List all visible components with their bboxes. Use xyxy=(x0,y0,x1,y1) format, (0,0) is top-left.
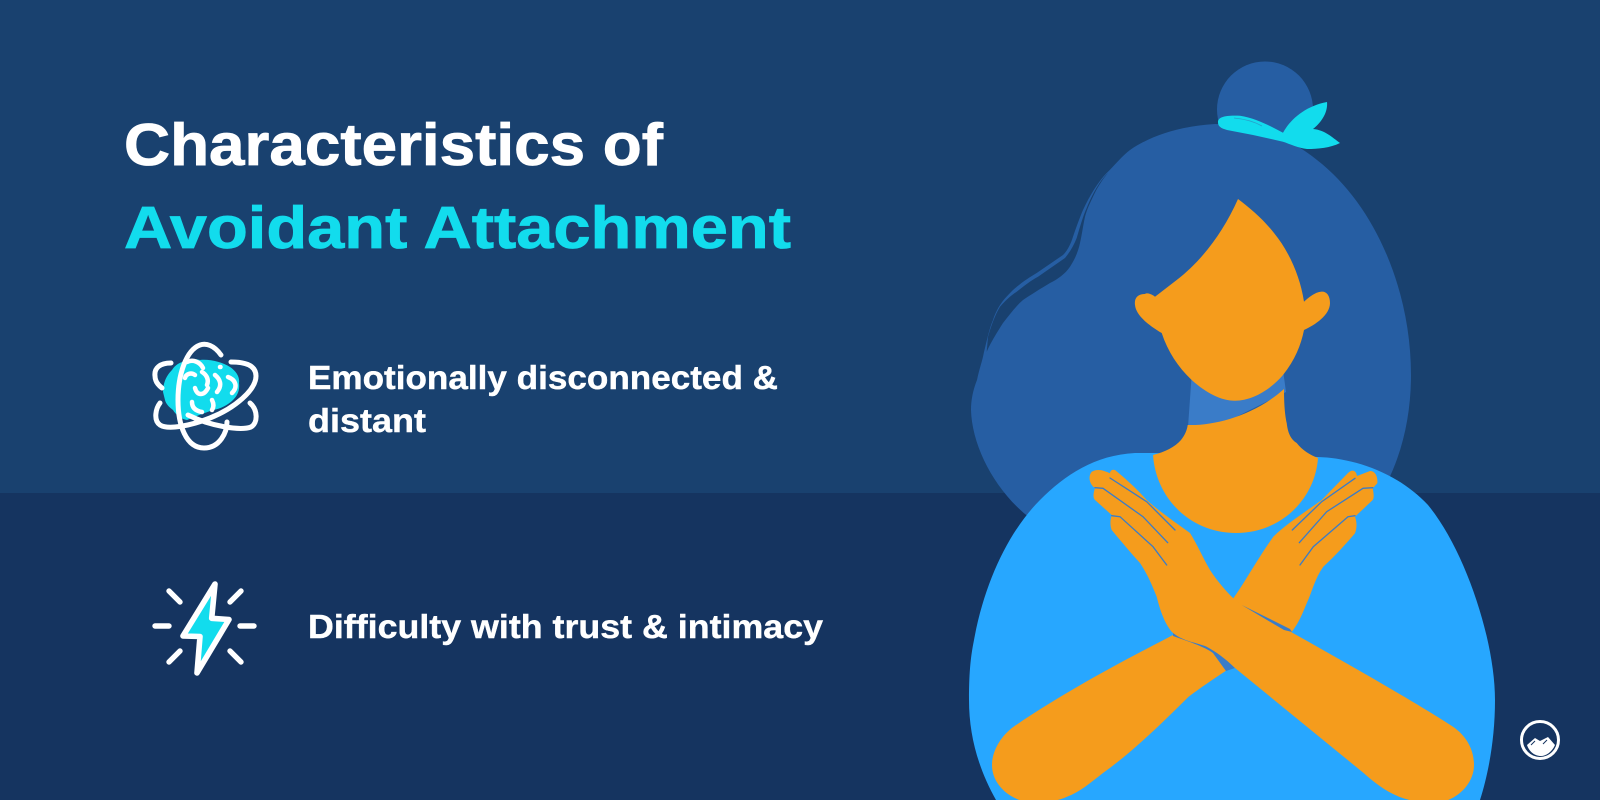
rays xyxy=(155,591,254,662)
text line 2: distant xyxy=(308,402,426,439)
hair xyxy=(971,124,1411,525)
illustration: woman crossing arms xyxy=(969,62,1495,800)
logo mountains xyxy=(1527,737,1555,756)
icon: lightning bolt xyxy=(155,584,254,673)
bolt xyxy=(183,584,229,673)
title line 2: Avoidant Attachment xyxy=(124,195,791,261)
logo peak marks xyxy=(1531,740,1547,745)
background: lower band xyxy=(0,493,1600,800)
brain folds xyxy=(185,361,235,412)
face xyxy=(1135,199,1330,401)
arm crease xyxy=(1242,605,1292,632)
finger lines xyxy=(1095,478,1373,565)
hair bun xyxy=(1217,62,1313,158)
text line 1: Emotionally disconnected & xyxy=(308,359,778,396)
hair ribbon xyxy=(1218,102,1340,149)
icon: brain with orbits xyxy=(155,344,256,448)
text: emotionally disconnected xyxy=(308,359,778,439)
neck shadow xyxy=(1188,370,1286,427)
orbit rings xyxy=(155,344,256,448)
neck and chest xyxy=(1153,389,1318,533)
ribbon crease xyxy=(1234,118,1262,126)
logo ring xyxy=(1522,722,1558,758)
back arm: hand xyxy=(1200,471,1377,640)
title xyxy=(124,112,791,261)
title line 1: Characteristics of xyxy=(124,112,663,178)
hair strand gap xyxy=(987,173,1108,352)
wrist shadow xyxy=(1173,633,1235,671)
front arm: hand and forearm xyxy=(1090,470,1474,800)
back arm: lower forearm xyxy=(992,635,1226,800)
shirt xyxy=(969,453,1495,800)
text: difficulty with trust: Difficulty with trust & intimacy xyxy=(308,608,824,645)
logo xyxy=(1522,722,1558,758)
background: upper band xyxy=(0,0,1600,493)
brain blob xyxy=(163,359,239,420)
